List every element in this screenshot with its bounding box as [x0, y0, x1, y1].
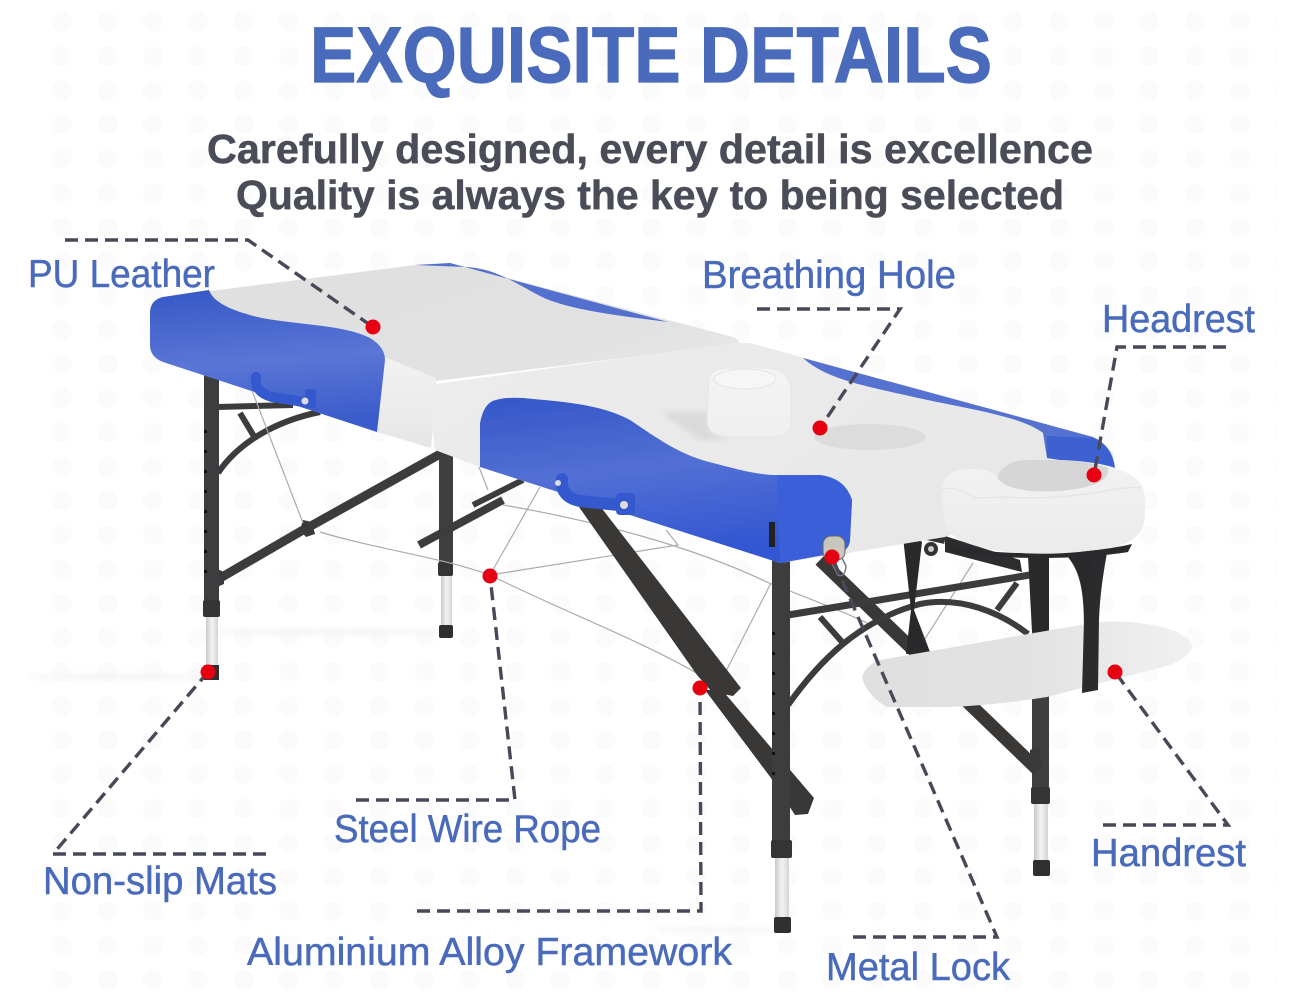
- front left leg: [203, 372, 220, 680]
- large folding strut: [572, 497, 814, 815]
- floor shadows: [25, 629, 785, 933]
- back right leg: [1031, 555, 1050, 876]
- callout markers: [200, 320, 1122, 696]
- subtitle: Carefully designed, every detail is excellence: [207, 126, 1093, 172]
- front frame arch: [788, 575, 1030, 705]
- subtitle: [207, 126, 1093, 218]
- folding struts: [218, 405, 1038, 770]
- headrest bracket and straps: [879, 518, 1132, 654]
- steel wire ropes: [251, 388, 973, 683]
- label: Handrest: Handrest: [1091, 832, 1246, 875]
- back left leg: [438, 452, 453, 638]
- label: Headrest: Headrest: [1102, 298, 1255, 341]
- strut hinge brackets: [215, 520, 1040, 770]
- headrest: [942, 460, 1145, 554]
- pillow: [707, 368, 791, 437]
- label: Steel Wire Rope: Steel Wire Rope: [334, 808, 601, 851]
- metal lock: [823, 536, 846, 576]
- label: Breathing Hole: Breathing Hole: [702, 254, 956, 297]
- massage table illustration: [25, 263, 1192, 933]
- breathing hole: [814, 424, 926, 450]
- handrest strap front: [1082, 553, 1107, 693]
- title: EXQUISITE DETAILS: [310, 10, 992, 99]
- left handle: [256, 377, 316, 408]
- right table section: [430, 343, 1115, 563]
- label: Aluminium Alloy Framework: Aluminium Alloy Framework: [247, 931, 732, 974]
- label: PU Leather: PU Leather: [28, 253, 215, 296]
- pillow shadow: [660, 412, 730, 440]
- label: Metal Lock: Metal Lock: [826, 946, 1010, 989]
- subtitle: Quality is always the key to being selected: [236, 172, 1064, 218]
- leg adjustment holes: [204, 430, 775, 775]
- front right leg: [771, 560, 792, 933]
- label: Non-slip Mats: Non-slip Mats: [43, 860, 277, 903]
- handrest: [862, 622, 1192, 707]
- callout lines: [53, 240, 1228, 937]
- right handle: [555, 479, 635, 515]
- left table section: [150, 263, 739, 448]
